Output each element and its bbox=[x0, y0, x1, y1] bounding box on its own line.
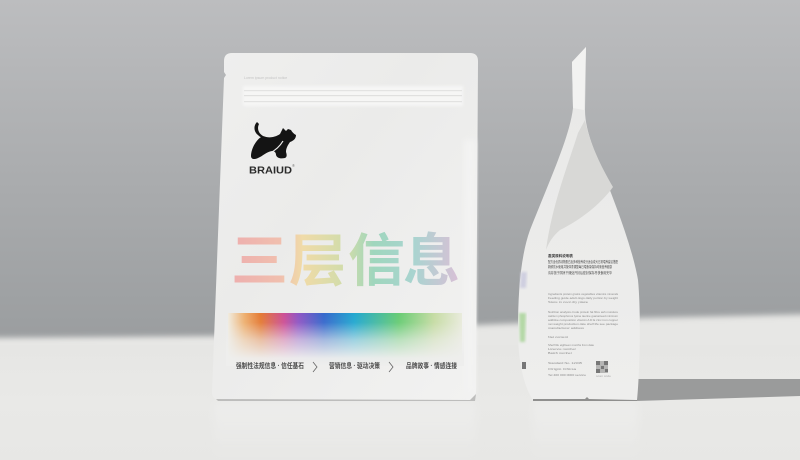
QR code bbox=[596, 361, 608, 373]
gusset printed mark bbox=[522, 362, 526, 369]
back panel text: Licence number bbox=[548, 347, 576, 351]
icon: dog logo bbox=[251, 122, 296, 159]
bag right edge highlight bbox=[464, 140, 476, 392]
background wall bbox=[0, 0, 800, 345]
back panel text: Tel 400 000 0000 service bbox=[548, 373, 587, 377]
arrow 1 bbox=[313, 362, 317, 372]
back panel text: net weight production date shelf life see package bbox=[548, 322, 619, 326]
back heading: 避类原料说明表 bbox=[548, 253, 573, 258]
back panel text: Shelf life eighteen months from date bbox=[548, 343, 594, 347]
side bag bbox=[518, 47, 640, 401]
back paragraph 2: Ingredients protein grains vegetables vitamins minerals bbox=[548, 292, 619, 296]
side bag bottom edge bbox=[533, 397, 637, 401]
bag reflection on floor bbox=[214, 403, 476, 460]
label: brand story: 品牌故事 · 情感连接 bbox=[406, 361, 457, 370]
registered mark: ® bbox=[292, 163, 295, 168]
back paragraph 3: Nutrition analysis crude protein fat fibre ash moisture bbox=[548, 310, 618, 314]
back panel text: 新鲜饮水使用并按体重调整每日喂食量保持均衡营养健康 bbox=[548, 264, 613, 269]
back panel text bbox=[548, 253, 619, 377]
top seal highlight bbox=[572, 47, 586, 110]
back panel text: calcium phosphorus lysine taurine guaranteed minimum bbox=[548, 314, 619, 318]
back panel text: additive composition vitamin A D E zinc iron copper bbox=[548, 318, 618, 322]
back panel text: Store in cool dry place bbox=[548, 300, 589, 304]
label: compliance info: 强制性法规信息 · 信任基石 bbox=[236, 361, 304, 370]
QR caption: scan code bbox=[596, 375, 612, 378]
back paragraph 4: Net content bbox=[548, 335, 568, 339]
left gusset colour strip bbox=[519, 313, 526, 342]
rainbow gradient band bbox=[226, 313, 464, 366]
zipper seal bbox=[243, 86, 463, 106]
back paragraph 1: 配方含优质动物蛋白及多种营养成分适合成犬日常喂养建议搭配 bbox=[548, 259, 619, 264]
label: marketing info: 营销信息 · 驱动决策 bbox=[329, 361, 380, 370]
back panel text: 请存放于阴凉干燥处开封后密封保存尽快食用完毕 bbox=[548, 270, 613, 275]
back panel text: Origin China bbox=[548, 367, 577, 371]
small print at top: Lorem ipsum product notice bbox=[244, 76, 287, 80]
back panel text: Standard No. 12345 bbox=[548, 361, 583, 365]
back panel text: Feeding guide adult dogs daily portion by weight bbox=[548, 296, 618, 300]
title: three layers of information: 三层信息 bbox=[231, 230, 460, 294]
side bag reflection on floor bbox=[533, 403, 638, 460]
cast shadow of side bag bbox=[636, 379, 800, 401]
inner fold shadow bbox=[546, 120, 613, 250]
floor surface bbox=[0, 314, 800, 460]
left gusset lilac strip bbox=[520, 272, 527, 288]
front bag bbox=[212, 53, 478, 401]
bag body bbox=[212, 53, 478, 400]
back panel text: Batch number bbox=[548, 351, 572, 355]
arrow 2 bbox=[389, 362, 393, 372]
brand name: BRAIUD bbox=[249, 166, 292, 176]
back panel text: manufacturer address bbox=[548, 326, 585, 330]
bottom edge shadow bbox=[216, 394, 476, 401]
side bag body bbox=[518, 47, 640, 400]
